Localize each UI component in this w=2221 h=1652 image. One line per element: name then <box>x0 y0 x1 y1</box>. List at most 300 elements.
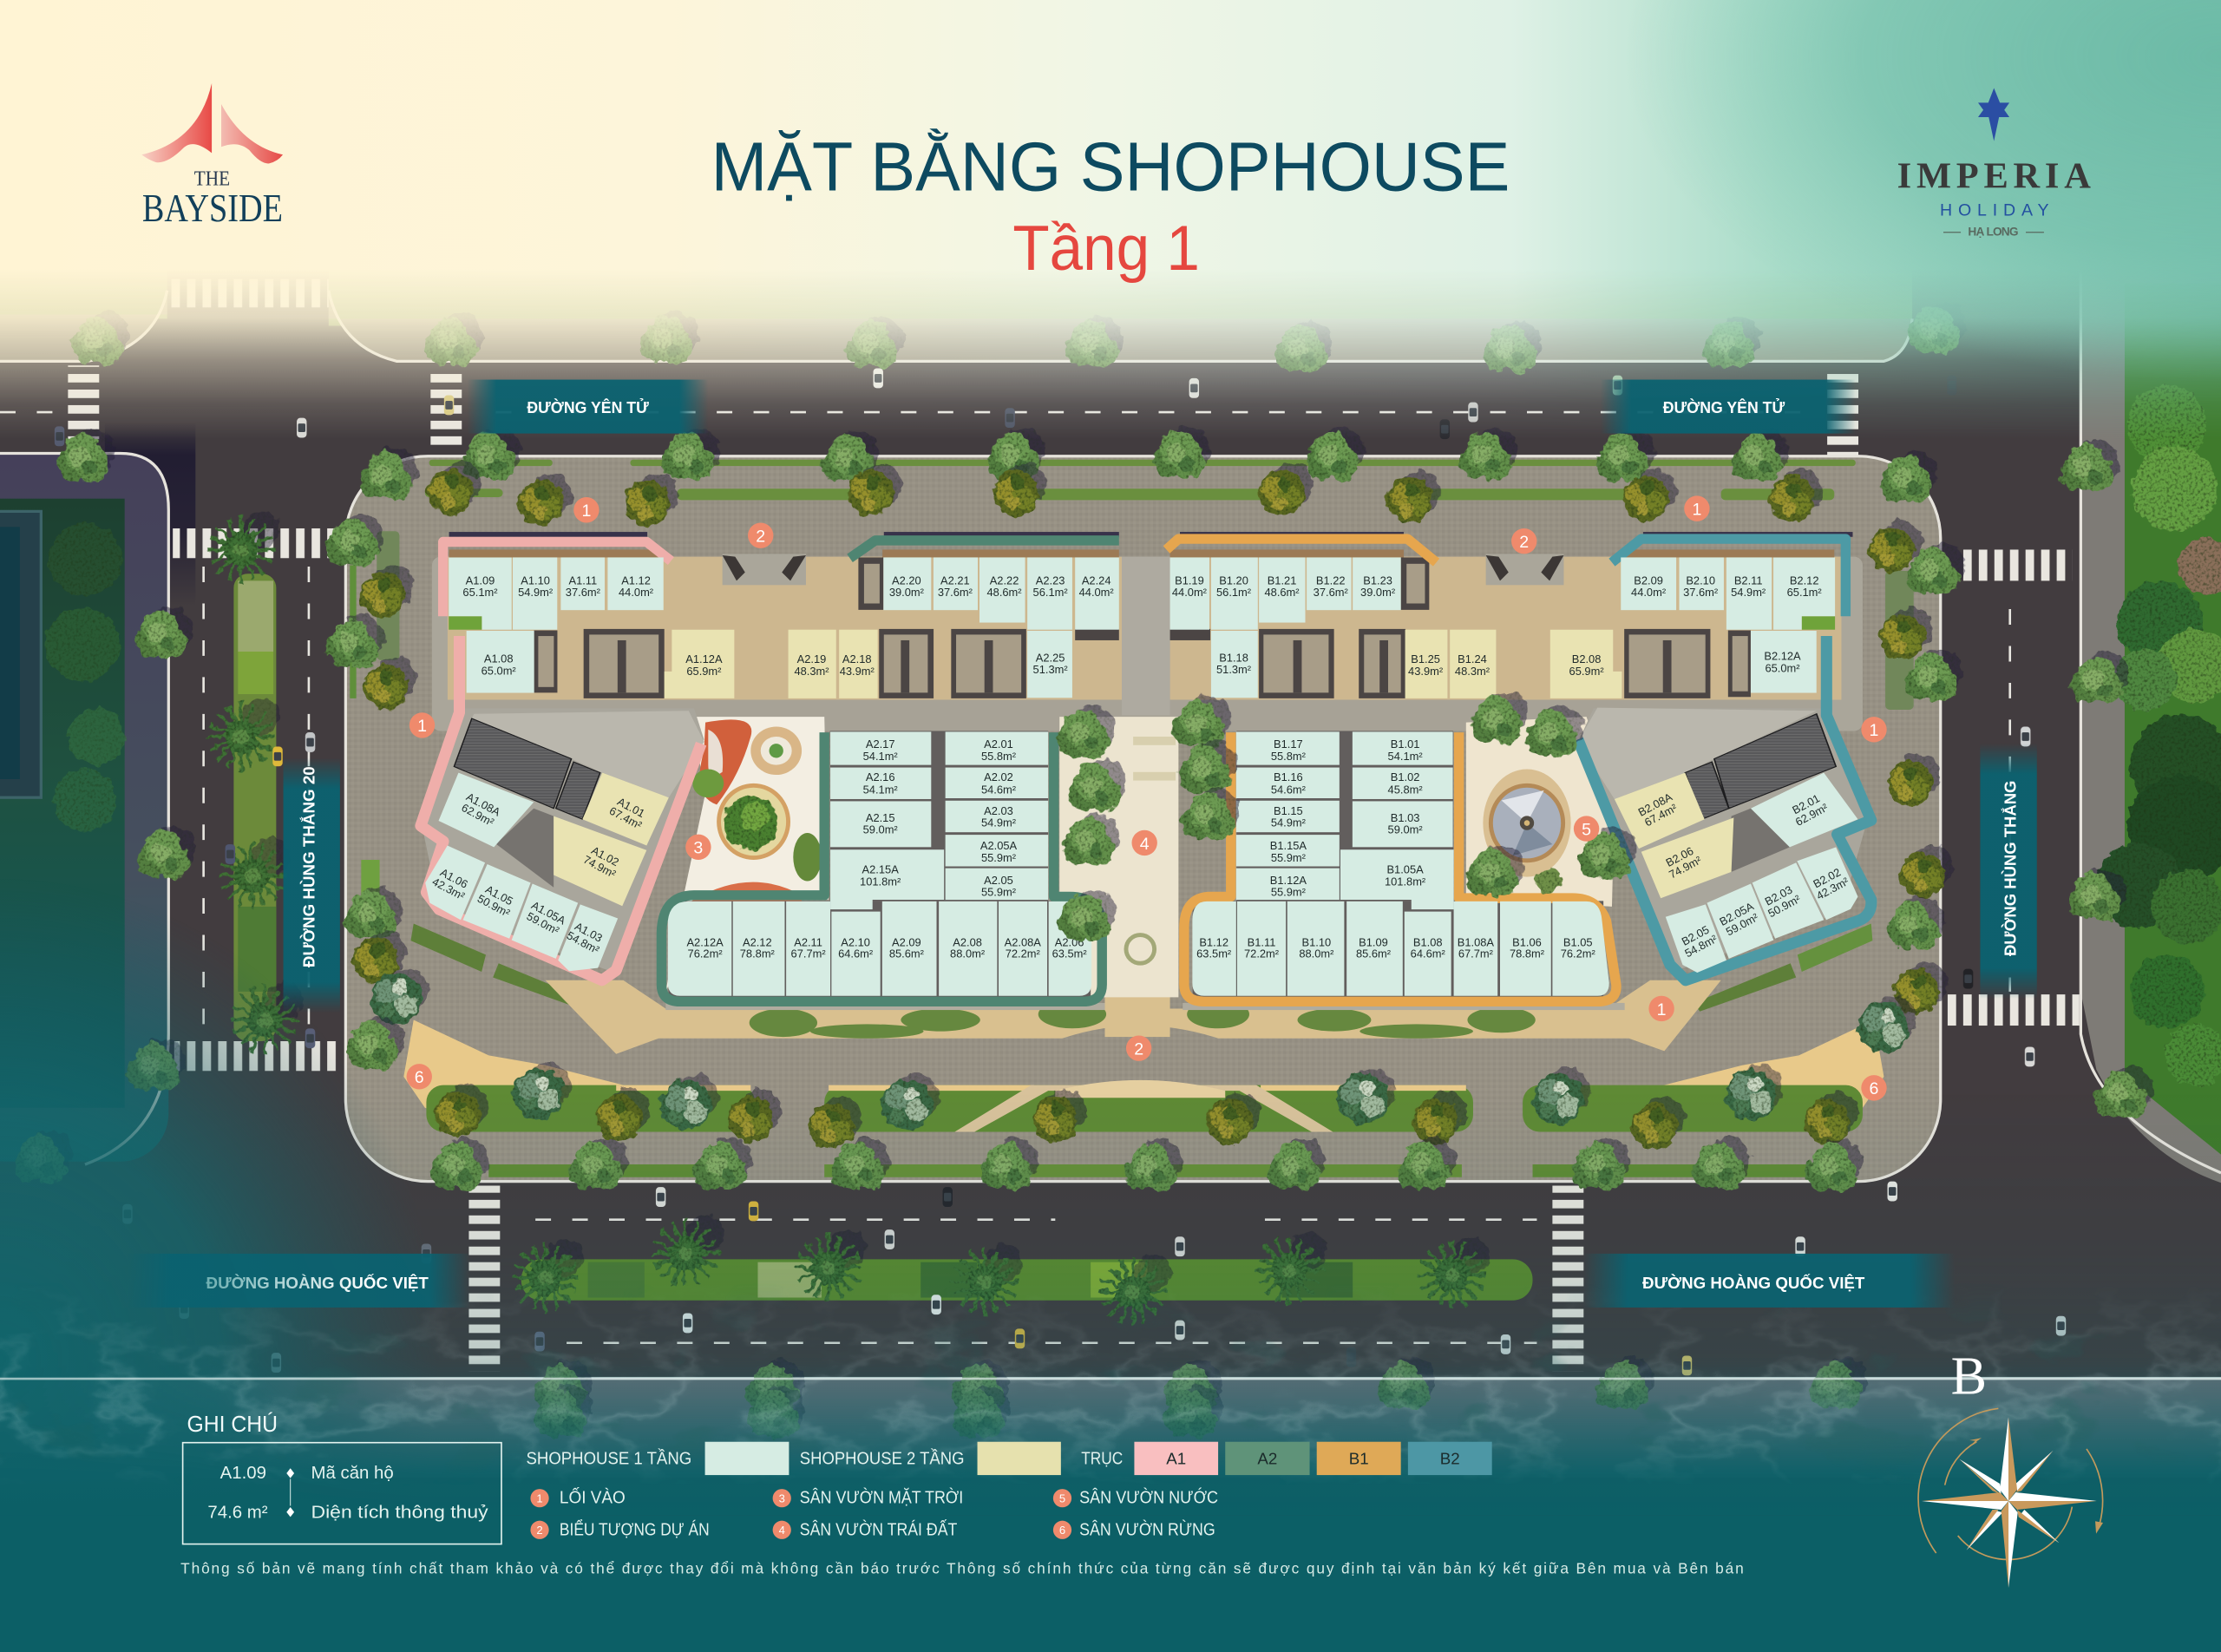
unit B1.11: B1.11 <box>1248 936 1275 949</box>
left teal fade <box>0 793 453 1530</box>
street label: Hoàng Quốc Việt east: ĐƯỜNG HOÀNG QUỐC VIỆT <box>1642 1274 1865 1292</box>
axis shell A2 <box>661 541 1119 1001</box>
unit B1.09 <box>1346 901 1403 996</box>
legend key box: 74.6 m² <box>207 1503 268 1522</box>
unit B1.02 <box>1353 768 1453 799</box>
marble veins <box>0 1320 2221 1468</box>
unit A2.15: A2.15 <box>866 811 895 824</box>
unit B1.22: B1.22 <box>1316 574 1346 587</box>
unit B1.24: 48.3m² <box>1455 665 1490 678</box>
unit A2.02: 54.6m² <box>981 783 1017 796</box>
unit A2.12A: 76.2m² <box>688 947 723 960</box>
street label: Yên Tử east <box>1601 380 1856 434</box>
unit B1.22 <box>1307 557 1352 610</box>
entrances <box>723 554 1563 585</box>
unit B1.08A: B1.08A <box>1458 936 1494 949</box>
unit A2.16: 54.1m² <box>863 783 898 796</box>
numbered markers on the plan: 3 <box>693 839 703 858</box>
logo: Imperia Holiday: HOLIDAY <box>1940 200 2049 220</box>
unit A2.11: A2.11 <box>794 936 822 949</box>
numbered markers on the plan: 1 <box>1692 500 1701 519</box>
unit A2.19 <box>789 630 836 698</box>
building shadow on the junction <box>105 423 195 606</box>
unit A2.02: A2.02 <box>984 770 1013 783</box>
site base: paved plot <box>345 456 1941 1182</box>
garden 5: water garden <box>1466 717 1615 907</box>
legend: numbered places: 4 <box>779 1524 785 1537</box>
unit A2.15A <box>830 849 944 909</box>
east corner garden 6 <box>1653 1020 1884 1122</box>
unit A2.20: A2.20 <box>892 574 921 587</box>
unit A2.12 <box>733 901 784 996</box>
legend: numbered places <box>530 1487 1218 1539</box>
unit B1.03: 59.0m² <box>1388 823 1423 836</box>
legend: numbered places: 6 <box>1059 1524 1065 1537</box>
unit B1.01 <box>1353 731 1453 765</box>
unit B1.15A: B1.15A <box>1270 839 1307 852</box>
legend: numbered places: 1 <box>536 1491 543 1504</box>
unit B1.23: B1.23 <box>1363 574 1392 587</box>
street label: Yên Tử east: ĐƯỜNG YÊN TỬ <box>1663 398 1785 416</box>
unit B1.08 <box>1405 912 1451 996</box>
west wing courtyard <box>472 711 704 797</box>
unit A1.12A: 65.9m² <box>686 665 722 678</box>
unit B1.05 <box>1552 901 1609 996</box>
unit A1.05 <box>463 864 531 939</box>
unit A2.06: A2.06 <box>1055 936 1084 949</box>
axis shell B1 <box>1166 539 1616 1001</box>
numbered markers on the plan: 2 <box>756 527 765 546</box>
south sidewalk <box>0 1377 2221 1478</box>
legend: axis colours: TRỤC <box>1081 1450 1123 1469</box>
legend key box: Mã căn hộ <box>311 1464 394 1483</box>
unit B1.21: 48.6m² <box>1265 586 1300 599</box>
legend: numbered places: 2 <box>536 1524 543 1537</box>
numbered markers on the plan: 5 <box>1582 820 1591 839</box>
unit A2.05A <box>946 835 1048 867</box>
trees <box>14 426 2153 1326</box>
subtitle: Tầng 1 <box>1012 212 1200 284</box>
unit B2.05: 54.8m² <box>1682 932 1720 960</box>
unit A2.25: A2.25 <box>1036 651 1065 664</box>
unit B2.05A: B2.05A <box>1717 900 1756 928</box>
unit A1.03 <box>558 904 618 971</box>
unit B1.15A: 55.9m² <box>1271 851 1307 864</box>
legend: numbered places: SÂN VƯỜN NƯỚC <box>1079 1488 1218 1508</box>
unit B1.22: 37.6m² <box>1314 586 1348 599</box>
unit B1.08A <box>1454 901 1497 996</box>
unit A2.23: A2.23 <box>1036 574 1065 587</box>
unit A2.08: A2.08 <box>953 936 982 949</box>
unit A1.06: A1.06 <box>438 866 470 891</box>
street label: Hoàng Quốc Việt east <box>1583 1254 1955 1308</box>
unit B1.21 <box>1259 557 1305 623</box>
top haze panel <box>0 0 2221 468</box>
unit A1.10 <box>513 557 557 630</box>
unit A1.01: 67.4m² <box>607 804 645 832</box>
unit A1.08A: 62.9m² <box>459 801 497 829</box>
unit B1.21: B1.21 <box>1268 574 1296 587</box>
unit B1.19: 44.0m² <box>1172 586 1208 599</box>
unit A2.01: A2.01 <box>984 738 1013 751</box>
unit B1.19 <box>1170 557 1209 630</box>
unit B1.01: B1.01 <box>1391 738 1419 751</box>
legend heading: GHI CHÚ <box>187 1411 278 1437</box>
unit B1.08: 64.6m² <box>1411 947 1445 960</box>
axis shell B2 <box>1578 539 1871 980</box>
unit A2.01: 55.8m² <box>981 750 1017 763</box>
unit B1.24: B1.24 <box>1458 652 1487 665</box>
unit B1.08A: 67.7m² <box>1458 947 1494 960</box>
unit A2.17 <box>830 731 931 765</box>
unit A2.17: A2.17 <box>866 738 895 751</box>
unit B1.25 <box>1405 630 1447 698</box>
logo: The Bayside: THE <box>194 167 230 190</box>
unit B1.23: 39.0m² <box>1360 586 1396 599</box>
unit A2.20: 39.0m² <box>889 586 925 599</box>
unit B2.01 <box>1751 773 1857 847</box>
unit A1.12A <box>665 630 734 698</box>
unit A2.06: 63.5m² <box>1052 947 1087 960</box>
garden 4: earth garden <box>1059 717 1178 997</box>
unit A2.05A: A2.05A <box>980 839 1018 852</box>
logo: The Bayside <box>141 83 283 230</box>
unit A2.19: A2.19 <box>797 652 826 665</box>
legend: axis colours: A2 <box>1257 1450 1277 1468</box>
unit A1.11 <box>560 557 605 610</box>
unit A1.06 <box>425 846 485 920</box>
unit B1.05A: B1.05A <box>1386 863 1424 876</box>
unit A1.10: A1.10 <box>521 574 550 587</box>
unit B1.18 <box>1211 631 1258 698</box>
south garden strips <box>426 1080 1863 1177</box>
west road median <box>233 574 276 1041</box>
unit A1.09: 65.1m² <box>462 586 498 599</box>
street label: Hùng Thắng: ĐƯỜNG HÙNG THẮNG <box>2001 781 2019 956</box>
axis shell A1 <box>421 541 701 980</box>
units: axis A1 <box>425 557 734 971</box>
numbered markers on the plan: 6 <box>1870 1079 1879 1098</box>
shell shadow strips <box>449 532 1853 537</box>
unit B1.24 <box>1450 630 1496 698</box>
unit A2.15: 59.0m² <box>863 823 898 836</box>
unit B1.15 <box>1236 801 1340 832</box>
unit B1.15: 54.9m² <box>1271 816 1307 829</box>
numbered markers on the plan <box>407 495 1887 1101</box>
unit B1.10: B1.10 <box>1302 936 1331 949</box>
unit B2.05A <box>1707 883 1773 959</box>
unit A2.02 <box>946 768 1048 798</box>
unit B1.25: 43.9m² <box>1408 665 1444 678</box>
disclaimer: Thông số bản vẽ mang tính chất tham khảo và có thể được thay đổi mà không cần báo trước Thông số chính thức của từng căn sẽ được quy định tại văn bản ký kết giữa Bên mua và Bên bán <box>180 1560 1744 1577</box>
numbered markers on the plan: 6 <box>415 1068 424 1087</box>
unit B1.03 <box>1353 801 1453 847</box>
unit A2.08A <box>999 901 1047 996</box>
west corner garden 6 <box>403 1020 634 1122</box>
legend key box: Diện tích thông thuỷ <box>311 1503 489 1522</box>
street label: Hoàng Quốc Việt west: ĐƯỜNG HOÀNG QUỐC VIỆT <box>206 1274 429 1292</box>
unit A2.12: 78.8m² <box>740 947 776 960</box>
unit B1.17 <box>1236 731 1340 765</box>
unit B2.06: 74.9m² <box>1667 853 1704 882</box>
unit B2.06: B2.06 <box>1664 844 1695 869</box>
unit B1.25: B1.25 <box>1411 652 1440 665</box>
unit B1.20 <box>1211 557 1258 630</box>
unit B2.08: 65.9m² <box>1569 665 1604 678</box>
unit A2.09: A2.09 <box>892 936 921 949</box>
unit B2.12A: 65.0m² <box>1765 662 1800 675</box>
legend: axis colours: A1 <box>1166 1450 1186 1468</box>
unit B1.20: 56.1m² <box>1216 586 1252 599</box>
east wing roof <box>1685 714 1836 819</box>
title: MẶT BẰNG SHOPHOUSE <box>711 128 1510 206</box>
unit A2.05A: 55.9m² <box>981 851 1017 864</box>
unit A1.12 <box>607 557 664 610</box>
unit A2.08 <box>939 901 997 996</box>
unit A2.10: A2.10 <box>841 936 870 949</box>
logo: Imperia Holiday: HẠ LONG <box>1968 226 2019 239</box>
unit B2.08 <box>1550 630 1622 698</box>
legend: numbered places: SÂN VƯỜN MẶT TRỜI <box>800 1488 963 1508</box>
unit B2.06 <box>1641 817 1733 898</box>
unit A1.02: 74.9m² <box>581 853 619 881</box>
unit A2.01 <box>946 731 1048 765</box>
cars <box>55 368 2066 1375</box>
unit B1.12 <box>1192 901 1236 996</box>
unit B1.17: B1.17 <box>1274 738 1303 751</box>
north block with grass and sidewalk <box>0 241 1912 361</box>
unit B1.09: 85.6m² <box>1356 947 1392 960</box>
legend: numbered places: 3 <box>779 1491 785 1504</box>
building forecourt <box>432 557 1863 731</box>
unit B1.08: B1.08 <box>1413 936 1443 949</box>
unit B1.12A: B1.12A <box>1270 874 1307 887</box>
unit A2.12: A2.12 <box>743 936 772 949</box>
legend: numbered places: 5 <box>1059 1491 1065 1504</box>
unit A2.20 <box>883 557 931 610</box>
unit A2.09 <box>882 901 937 996</box>
central gap <box>1122 557 1170 715</box>
numbered markers on the plan: 2 <box>1519 533 1529 552</box>
compass rose <box>1918 1408 2103 1588</box>
unit A2.23: 56.1m² <box>1033 586 1068 599</box>
legend: numbered places: BIỂU TƯỢNG DỰ ÁN <box>560 1519 710 1539</box>
unit A1.05A <box>512 883 578 959</box>
unit A2.05: 55.9m² <box>981 885 1017 898</box>
unit A1.01: A1.01 <box>615 795 647 820</box>
unit B2.01: B2.01 <box>1790 791 1822 816</box>
green hedges on north edge <box>425 460 1856 500</box>
legend: shophouse 2 floors: SHOPHOUSE 2 TẦNG <box>800 1449 965 1469</box>
unit B2.05 <box>1666 904 1726 973</box>
unit B2.12: B2.12 <box>1790 574 1819 587</box>
unit B2.09 <box>1621 557 1676 610</box>
units: axis B2 <box>1550 557 1857 973</box>
unit B1.11: 72.2m² <box>1244 947 1280 960</box>
unit A2.22: 48.6m² <box>987 586 1022 599</box>
unit B1.19: B1.19 <box>1175 574 1204 587</box>
logo: Imperia Holiday: IMPERIA <box>1897 156 2091 197</box>
unit B2.02: B2.02 <box>1811 865 1843 890</box>
street label: Hùng Thắng 20: ĐƯỜNG HÙNG THẮNG 20 <box>299 766 318 967</box>
unit B2.11: B2.11 <box>1734 574 1763 587</box>
unit A2.17: 54.1m² <box>863 750 898 763</box>
street label: Hùng Thắng 20 <box>284 757 340 1013</box>
unit B2.09: 44.0m² <box>1631 586 1667 599</box>
unit A2.22: A2.22 <box>990 574 1019 587</box>
unit A1.05: A1.05 <box>483 882 515 908</box>
top-right teal glow <box>1558 0 2221 397</box>
numbered markers on the plan: 1 <box>417 717 427 736</box>
west and east planting strips <box>350 531 1914 1012</box>
unit B1.11 <box>1237 901 1286 996</box>
unit A1.12: A1.12 <box>621 574 651 587</box>
crosswalks <box>68 365 2080 1371</box>
north marker B: B <box>1951 1347 1987 1406</box>
unit A2.10 <box>831 912 881 996</box>
unit B1.05: B1.05 <box>1563 936 1593 949</box>
unit B2.12A <box>1751 631 1817 693</box>
unit B1.20: B1.20 <box>1219 574 1248 587</box>
west wing roof <box>454 718 600 819</box>
unit A2.08A: A2.08A <box>1005 936 1041 949</box>
unit A1.05A: A1.05A <box>529 899 568 928</box>
unit B1.05A: 101.8m² <box>1385 875 1426 888</box>
unit A1.05: 50.9m² <box>475 892 513 920</box>
south tan promenade <box>546 980 1721 1054</box>
legend: numbered places: SÂN VƯỜN TRÁI ĐẤT <box>800 1519 957 1539</box>
unit B2.10 <box>1680 557 1724 610</box>
unit A2.03 <box>946 801 1048 832</box>
unit B1.03: B1.03 <box>1391 811 1419 824</box>
numbered markers on the plan: 1 <box>581 502 591 521</box>
legend: shophouse 1 floor: SHOPHOUSE 1 TẦNG <box>527 1449 691 1469</box>
unit A2.23 <box>1027 557 1072 630</box>
logo: Imperia Holiday <box>1897 88 2091 239</box>
unit A2.24: A2.24 <box>1082 574 1111 587</box>
unit B1.10 <box>1287 901 1344 996</box>
building podium floor <box>448 557 1841 700</box>
east block: sidewalk and forest <box>2080 255 2221 1183</box>
lower row outer ring <box>665 1003 1625 1010</box>
unit A2.18: A2.18 <box>842 652 872 665</box>
legend: axis colours: B2 <box>1440 1450 1460 1468</box>
central blocks base <box>669 731 1603 997</box>
unit B1.01: 54.1m² <box>1388 750 1423 763</box>
unit B1.18: B1.18 <box>1219 651 1248 664</box>
far-north trees under haze <box>71 302 1966 372</box>
far-south trees <box>534 1357 1867 1438</box>
unit A2.05: A2.05 <box>984 874 1013 887</box>
west block: sidewalk, woods and pool <box>0 453 168 1164</box>
unit A2.24: 44.0m² <box>1079 586 1114 599</box>
unit A1.10: 54.9m² <box>518 586 554 599</box>
unit A2.25 <box>1027 631 1072 698</box>
unit B1.05A <box>1340 849 1454 909</box>
corridor <box>459 700 1827 731</box>
unit B2.11: 54.9m² <box>1731 586 1766 599</box>
unit A1.02: A1.02 <box>589 843 621 869</box>
unit A1.11: A1.11 <box>568 574 597 587</box>
unit B1.05: 76.2m² <box>1561 947 1596 960</box>
numbered markers on the plan: 1 <box>1870 721 1878 740</box>
unit A2.09: 85.6m² <box>889 947 925 960</box>
unit B1.17: 55.8m² <box>1271 750 1307 763</box>
unit A2.24 <box>1075 557 1119 630</box>
planter corners <box>449 616 1835 630</box>
unit B1.18: 51.3m² <box>1216 663 1252 676</box>
numbered markers on the plan: 2 <box>1134 1040 1143 1059</box>
garden 3: sun garden <box>665 717 829 992</box>
unit A2.11 <box>786 901 830 996</box>
unit B1.02: 45.8m² <box>1388 783 1423 796</box>
legend: numbered places: LỐI VÀO <box>560 1487 626 1508</box>
east wing base <box>1579 708 1867 972</box>
west wing stair core <box>496 809 554 888</box>
street label: Hoàng Quốc Việt west <box>128 1254 470 1308</box>
west wing base <box>423 708 704 972</box>
unit A1.03: 54.8m² <box>565 928 602 957</box>
unit B1.23 <box>1353 557 1401 610</box>
unit B2.09: B2.09 <box>1634 574 1663 587</box>
unit B1.10: 88.0m² <box>1299 947 1334 960</box>
unit B2.03: 50.9m² <box>1766 892 1803 920</box>
unit B1.06: B1.06 <box>1512 936 1542 949</box>
unit A2.05 <box>946 869 1048 900</box>
legend key box: A1.09 <box>220 1464 266 1483</box>
unit A2.18: 43.9m² <box>840 665 875 678</box>
unit A1.09 <box>449 557 512 630</box>
unit A1.02 <box>554 816 646 906</box>
legend: axis colours: B1 <box>1349 1450 1369 1468</box>
unit B2.01: 62.9m² <box>1793 801 1831 829</box>
centre lane and beds <box>750 992 1536 1039</box>
unit A2.08A: 72.2m² <box>1006 947 1041 960</box>
unit B1.06 <box>1500 901 1551 996</box>
unit B2.02: 42.3m² <box>1814 875 1851 902</box>
unit B2.08A <box>1615 773 1705 849</box>
unit B2.11 <box>1726 557 1772 630</box>
unit B2.12A: B2.12A <box>1764 649 1801 662</box>
unit A1.08: A1.08 <box>484 652 514 665</box>
unit A2.21: A2.21 <box>940 574 970 587</box>
unit B1.06: 78.8m² <box>1510 947 1545 960</box>
east wing courtyard <box>1578 708 1817 799</box>
unit B1.15: B1.15 <box>1274 804 1303 817</box>
unit A2.16 <box>830 768 931 799</box>
unit B2.03 <box>1753 862 1824 939</box>
unit A2.15 <box>830 801 931 847</box>
unit A2.12A: A2.12A <box>686 936 724 949</box>
logo: The Bayside: BAYSIDE <box>142 186 283 230</box>
legend: numbered places: SÂN VƯỜN RỪNG <box>1079 1519 1215 1539</box>
numbered markers on the plan: 1 <box>1657 1000 1667 1019</box>
unit A1.12A: A1.12A <box>685 652 723 665</box>
legend key box <box>183 1443 501 1544</box>
numbered markers on the plan: 4 <box>1140 835 1150 854</box>
unit A2.18 <box>839 630 878 698</box>
unit A1.05A: 59.0m² <box>525 909 562 938</box>
unit B2.03: B2.03 <box>1763 883 1794 908</box>
street label: Yên Tử west: ĐƯỜNG YÊN TỬ <box>527 398 649 416</box>
unit A1.08 <box>467 631 534 693</box>
unit A1.09: A1.09 <box>466 574 495 587</box>
unit B2.12 <box>1773 557 1835 630</box>
unit B1.15A <box>1236 835 1340 867</box>
unit A2.15A: 101.8m² <box>860 875 901 888</box>
unit B2.08: B2.08 <box>1572 652 1601 665</box>
unit B2.05A: 59.0m² <box>1724 910 1761 938</box>
